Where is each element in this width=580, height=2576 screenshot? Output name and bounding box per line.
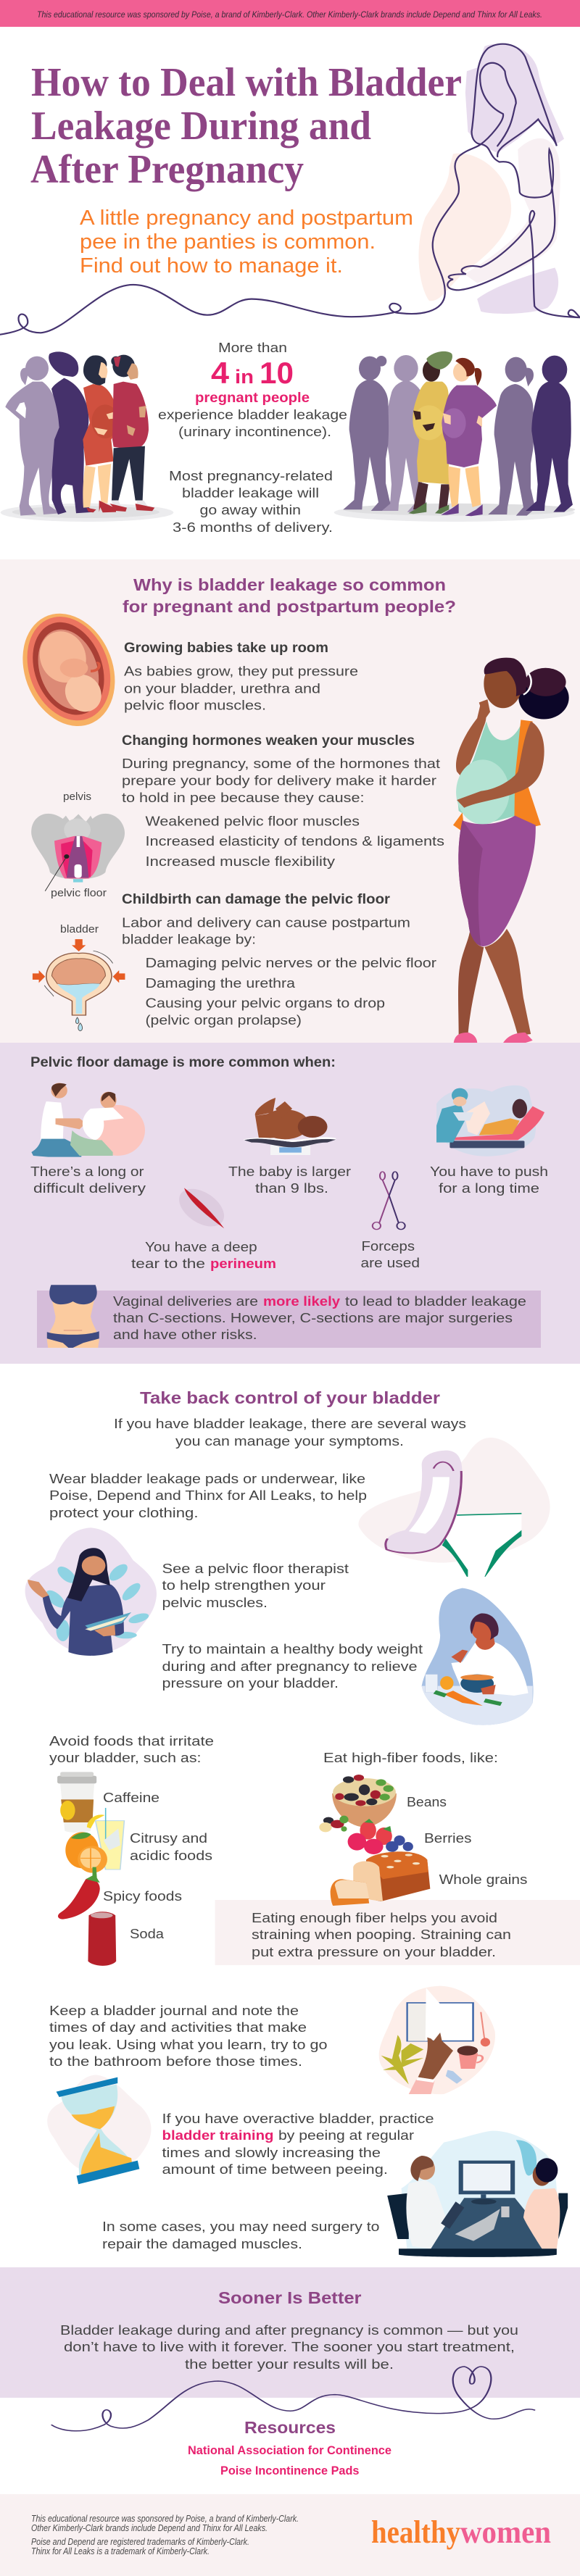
text: growing babies: Growing babies take up room xyxy=(124,641,328,656)
panel: sooner is better xyxy=(0,2267,580,2398)
text: eat high-fiber: Eat high-fiber foods, like: xyxy=(323,1750,498,1765)
text: goes away within 3-6 months: 3-6 months of delivery. xyxy=(173,520,333,535)
text: childbirth can damage: Damaging the urethra xyxy=(145,975,296,991)
caption: deep tear: tear to the xyxy=(131,1256,205,1271)
icon: pelvis diagram: pelvis xyxy=(63,791,91,803)
text: childbirth can damage: Damaging pelvic nerves or the pelvic floor xyxy=(145,955,436,970)
icon: oranges and lemonade xyxy=(65,1808,124,1873)
callout: vaginal deliveries vs C-sections: to lead to bladder leakage xyxy=(345,1293,526,1309)
caption: baby larger than 9 lbs xyxy=(228,1164,351,1196)
caption: baby larger than 9 lbs: than 9 lbs. xyxy=(255,1180,328,1196)
text: surgery xyxy=(102,2219,380,2251)
illustration: hourglass xyxy=(47,2075,152,2184)
text: see a therapist: to help strengthen your xyxy=(162,1577,326,1593)
text: footer disclosures xyxy=(31,2514,299,2556)
heading: resources: Resources xyxy=(244,2418,336,2437)
text: changing hormones: Changing hormones weaken your muscles xyxy=(122,733,415,749)
callout: vaginal deliveries vs C-sections: more likely xyxy=(263,1293,341,1309)
links: resources: Poise Incontinence Pads xyxy=(220,2464,359,2477)
panel: why is bladder leakage common xyxy=(0,559,580,1043)
line art: wave with heart xyxy=(51,2367,534,2431)
text: bladder training: amount of time between peeing. xyxy=(162,2162,388,2177)
text: wear pads xyxy=(49,1471,367,1520)
links: resources: National Association for Continence xyxy=(188,2443,392,2457)
caption: deep tear xyxy=(131,1239,276,1271)
line art: pregnant woman and wave xyxy=(0,43,580,335)
icon: bladder diagram: bladder xyxy=(60,924,99,935)
caption: long or difficult delivery xyxy=(30,1164,146,1196)
labels: high fiber foods: Berries xyxy=(424,1830,471,1846)
text: bladder training: If you have overactive bladder, practice xyxy=(162,2111,434,2126)
icon: pelvis diagram xyxy=(31,791,125,899)
labels: foods to avoid: Soda xyxy=(130,1926,165,1941)
text: healthy weight: during and after pregnancy to relieve xyxy=(162,1659,418,1674)
subtitle: A little pregnancy and postpartum xyxy=(80,207,413,230)
text: goes away within 3-6 months: go away within xyxy=(200,502,301,517)
text: healthy weight: pressure on your bladder. xyxy=(162,1675,339,1691)
text: bladder journal: Keep a bladder journal and note the xyxy=(49,2003,299,2018)
labels: foods to avoid: Spicy foods xyxy=(103,1888,182,1904)
panel: pelvic floor damage xyxy=(0,1043,580,1364)
text: several ways xyxy=(114,1416,466,1449)
caption: forceps: Forceps xyxy=(361,1238,415,1254)
text: goes away within 3-6 months: Most pregnancy-related xyxy=(169,468,333,483)
caption: deep tear: perineum xyxy=(210,1256,276,1271)
icon: fetus in womb xyxy=(9,605,128,735)
icon: belly with C-section scar xyxy=(47,1285,99,1348)
text: childbirth can damage: Causing your pelvic organs to drop xyxy=(145,996,385,1010)
illustration: right group of pregnant people xyxy=(334,351,575,522)
statistic: 4 in 10: experience bladder leakage xyxy=(158,407,347,422)
text: changing hormones: During pregnancy, some of the hormones that xyxy=(122,756,440,771)
caption: push for a long time: You have to push xyxy=(430,1164,548,1179)
illustration: doctor consultation xyxy=(387,2131,568,2257)
statistic: 4 in 10 xyxy=(158,340,347,439)
text: avoid foods xyxy=(49,1733,214,1765)
heading: why: Why is bladder leakage so common xyxy=(133,575,446,594)
text: changing hormones: Increased muscle flexibility xyxy=(145,854,336,869)
labels: foods to avoid: acidic foods xyxy=(130,1848,212,1863)
callout: vaginal deliveries vs C-sections: than C-sections. However, C-sections are major surgeries xyxy=(113,1310,513,1325)
text: growing babies: pelvic floor muscles. xyxy=(124,697,266,713)
labels: foods to avoid xyxy=(103,1790,212,1941)
text: changing hormones: Weakened pelvic floor muscles xyxy=(145,813,360,829)
labels: high fiber foods xyxy=(407,1794,528,1887)
labels: foods to avoid: Caffeine xyxy=(103,1790,160,1805)
text: healthy weight: Try to maintain a healthy body weight xyxy=(162,1641,423,1656)
text: growing babies: As babies grow, they put pressure xyxy=(124,664,358,679)
callout panel: eating fiber: Eating enough fiber helps you avoid xyxy=(252,1910,497,1925)
text: bladder training xyxy=(162,2111,434,2177)
text: childbirth can damage: Childbirth can damage the pelvic floor xyxy=(122,892,391,907)
heading: take back control: Take back control of your bladder xyxy=(140,1388,440,1407)
text: several ways: you can manage your symptoms. xyxy=(175,1433,404,1449)
top sponsor banner xyxy=(0,0,580,27)
top sponsor banner: This educational resource was sponsored by Poise, a brand of Kimberly-Clark. Other Kimberly-Clark brands include Depend and Thinx for All Leaks. xyxy=(37,11,542,20)
labels: high fiber foods: Beans xyxy=(407,1794,447,1809)
labels: high fiber foods: Whole grains xyxy=(439,1872,528,1887)
text: changing hormones: prepare your body for delivery make it harder xyxy=(122,772,436,788)
text: changing hormones: Increased elasticity of tendons & ligaments xyxy=(145,833,444,849)
illustration: pelvic floor therapist xyxy=(25,1527,157,1656)
text: sooner message: Bladder leakage during and after pregnancy is common — but you xyxy=(60,2322,518,2338)
icon: pelvis diagram: pelvic floor xyxy=(51,888,107,899)
text: wear pads: Wear bladder leakage pads or underwear, like xyxy=(49,1471,365,1486)
text: bladder journal: to the bathroom before those times. xyxy=(49,2054,302,2069)
text: goes away within 3-6 months xyxy=(169,468,333,535)
icon: bowl of beans xyxy=(319,1775,397,1832)
caption: baby larger than 9 lbs: The baby is larger xyxy=(228,1164,351,1179)
title: After Pregnancy xyxy=(30,147,304,192)
callout panel: eating fiber: put extra pressure on your bladder. xyxy=(252,1944,496,1959)
text: avoid foods: Avoid foods that irritate xyxy=(49,1733,214,1748)
logo: healthywomen: healthy xyxy=(371,2514,460,2550)
text: sooner message: the better your results will be. xyxy=(185,2356,394,2372)
text: footer disclosures: Poise and Depend are registered trademarks of Kimberly-Clark. xyxy=(31,2537,249,2547)
text: wear pads: Poise, Depend and Thinx for All Leaks, to help xyxy=(49,1488,367,1503)
caption: push for a long time: for a long time xyxy=(439,1180,539,1196)
callout panel: eating fiber xyxy=(215,1900,580,1965)
text: bladder training: bladder training xyxy=(162,2127,274,2143)
icon: perineal tear xyxy=(170,1184,233,1232)
caption: deep tear: You have a deep xyxy=(145,1239,257,1254)
heading: pelvic floor damage: Pelvic floor damage is more common when: xyxy=(30,1055,336,1070)
icon: berries xyxy=(348,1819,413,1854)
callout: vaginal deliveries vs C-sections xyxy=(37,1291,541,1348)
statistic: 4 in 10: More than xyxy=(218,340,287,355)
text: bladder training: by peeing at regular xyxy=(278,2127,414,2143)
heading: sooner is better: Sooner Is Better xyxy=(218,2288,362,2307)
text: bladder journal: you leak. Using what you learn, try to go xyxy=(49,2037,328,2052)
callout panel: eating fiber: straining when pooping. Straining can xyxy=(252,1927,511,1942)
title: Leakage During and xyxy=(31,104,371,149)
text: bladder training: times and slowly increasing the xyxy=(162,2145,381,2160)
subtitle: Find out how to manage it. xyxy=(80,254,343,278)
statistic: 4 in 10: in xyxy=(235,366,254,388)
text: healthy weight xyxy=(162,1641,423,1691)
text: sooner message: don’t have to live with it forever. The sooner you start treatment, xyxy=(64,2339,515,2354)
title xyxy=(30,60,462,192)
subtitle xyxy=(80,207,413,278)
text: childbirth can damage xyxy=(122,892,436,1028)
callout: vaginal deliveries vs C-sections: Vaginal deliveries are xyxy=(113,1293,258,1309)
illustration: laughing pregnant woman xyxy=(453,658,569,1045)
logo: healthywomen xyxy=(371,2514,551,2550)
illustration: left group of pregnant people xyxy=(1,351,173,522)
text: see a therapist: pelvic muscles. xyxy=(162,1595,268,1610)
text: see a therapist: See a pelvic floor therapist xyxy=(162,1561,349,1576)
statistic: 4 in 10: 10 xyxy=(260,356,294,390)
labels: foods to avoid: Citrusy and xyxy=(130,1830,207,1846)
text: growing babies xyxy=(124,641,358,713)
icon: chili pepper xyxy=(58,1867,100,1920)
icon: whole grain bread xyxy=(331,1851,430,1906)
text: wear pads: protect your clothing. xyxy=(49,1505,199,1520)
icon: delivery scene xyxy=(436,1085,544,1156)
text: footer disclosures: Thinx for All Leaks is a trademark of Kimberly-Clark. xyxy=(31,2546,210,2556)
heading: why xyxy=(123,575,456,616)
text: footer disclosures: This educational resource was sponsored by Poise, a brand of Kimberly-Clark. xyxy=(31,2514,299,2524)
text: childbirth can damage: (pelvic organ prolapse) xyxy=(145,1012,302,1028)
heading: why: for pregnant and postpartum people? xyxy=(123,597,456,616)
text: avoid foods: your bladder, such as: xyxy=(49,1750,202,1765)
illustration: pad and underwear xyxy=(358,1438,550,1577)
statistic: 4 in 10: pregnant people xyxy=(195,391,310,406)
icon: couple with birth ball xyxy=(31,1083,145,1157)
title: How to Deal with Bladder xyxy=(31,60,462,105)
icon: bladder diagram xyxy=(33,924,125,1031)
statistic: 4 in 10: (urinary incontinence). xyxy=(178,424,331,439)
text: footer disclosures: Other Kimberly-Clark brands include Depend and Thinx for All Leaks. xyxy=(31,2523,268,2533)
text: growing babies: on your bladder, urethra and xyxy=(124,681,320,696)
panel: footer xyxy=(0,2494,580,2576)
text: surgery: In some cases, you may need surgery to xyxy=(102,2219,380,2234)
text: changing hormones: to hold in pee because they cause: xyxy=(122,790,364,805)
subtitle: pee in the panties is common. xyxy=(80,230,376,254)
callout: vaginal deliveries vs C-sections: and have other risks. xyxy=(113,1327,257,1342)
caption: long or difficult delivery: difficult delivery xyxy=(33,1180,146,1196)
caption: forceps: are used xyxy=(361,1255,420,1270)
text: bladder journal xyxy=(49,2003,328,2069)
text: goes away within 3-6 months: bladder leakage will xyxy=(182,485,319,501)
caption: forceps xyxy=(361,1238,420,1270)
text: see a therapist xyxy=(162,1561,349,1610)
icon: forceps xyxy=(373,1172,405,1230)
text: bladder journal: times of day and activities that make xyxy=(49,2019,307,2035)
statistic: 4 in 10: 4 xyxy=(211,356,230,390)
text: several ways: If you have bladder leakage, there are several ways xyxy=(114,1416,466,1431)
text: changing hormones xyxy=(122,733,444,869)
logo: healthywomen: women xyxy=(460,2514,551,2550)
text: sooner message xyxy=(60,2322,518,2372)
icon: baby on scale xyxy=(244,1098,336,1155)
illustration: journal with hand and mug xyxy=(379,1986,495,2094)
illustration: woman eating healthy meal xyxy=(422,1588,534,1725)
text: surgery: repair the damaged muscles. xyxy=(102,2236,302,2251)
text: childbirth can damage: bladder leakage by: xyxy=(122,932,256,946)
caption: push for a long time xyxy=(430,1164,548,1196)
links: resources xyxy=(188,2443,392,2477)
icon: coffee cup xyxy=(57,1772,96,1833)
caption: long or difficult delivery: There’s a long or xyxy=(30,1164,144,1179)
text: childbirth can damage: Labor and delivery can cause postpartum xyxy=(122,914,410,930)
icon: soda can xyxy=(88,1912,116,1966)
